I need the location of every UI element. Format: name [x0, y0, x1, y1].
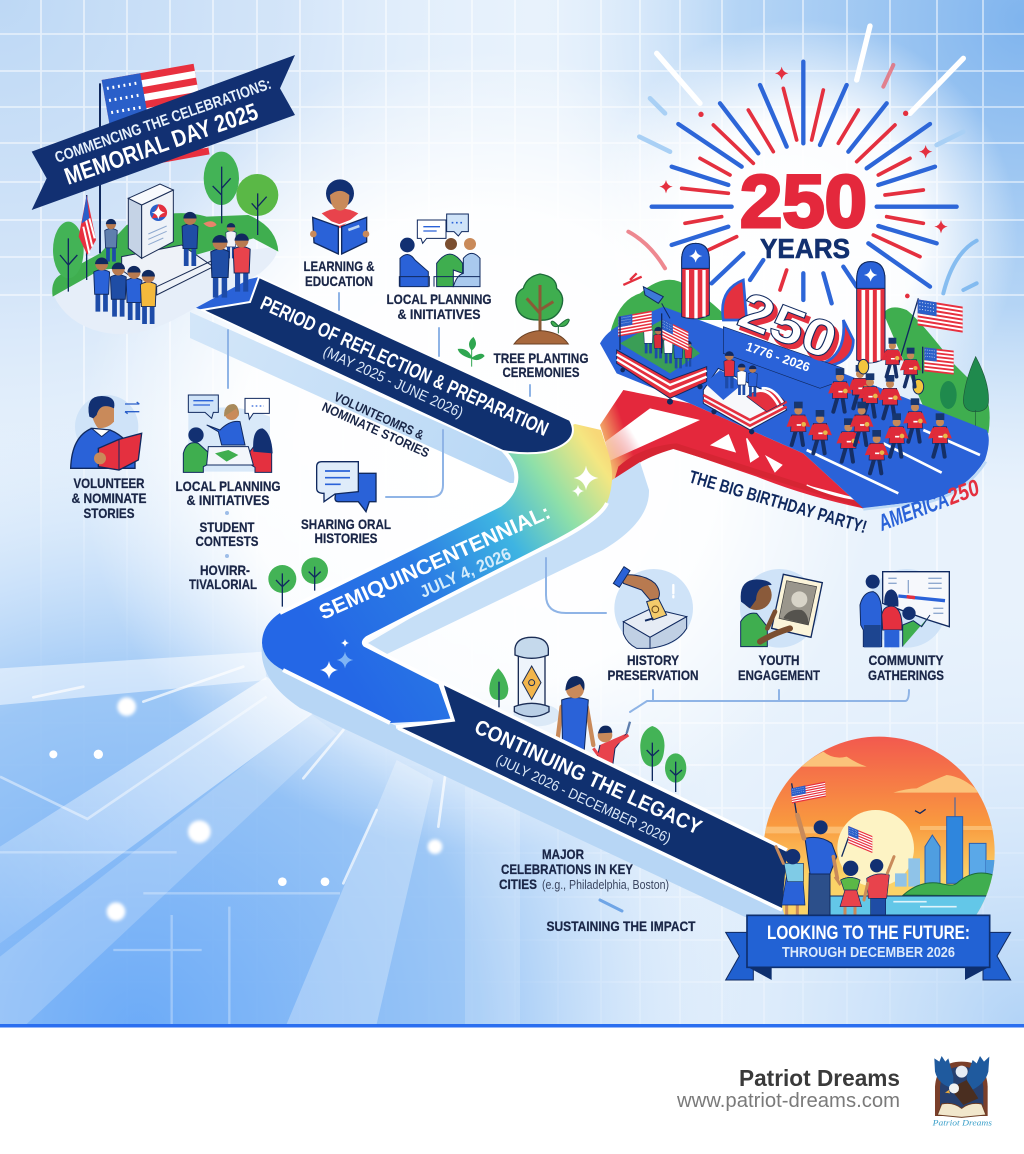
boy [864, 857, 894, 915]
label: local planning left [176, 478, 281, 508]
icons behind the road: mother, child and time capsule [489, 637, 686, 792]
label: major celebrations: MAJOR [542, 846, 584, 862]
label: hovirr-tivalorial [189, 562, 257, 592]
second float [703, 351, 787, 434]
left float [617, 273, 707, 405]
footer website: www.patriot-dreams.com [676, 1090, 900, 1112]
label: America250: AMERICA [874, 486, 952, 536]
label: history preservation: HISTORY [627, 652, 680, 668]
banner arc behind 250 [722, 280, 853, 367]
ribbon text: semiquincentennial: JULY 4, 2026 [417, 544, 514, 602]
banner text: looking to the future [767, 923, 970, 961]
label: learning and education: LEARNING & [304, 258, 374, 274]
icon: small trees left [268, 557, 328, 607]
label: youth engagement: ENGAGEMENT [738, 667, 820, 683]
connector dots [225, 511, 229, 558]
label: community gatherings [868, 652, 944, 683]
marchers flags [884, 298, 963, 387]
label: hovirr-tivalorial: HOVIRR- [200, 562, 250, 578]
people at memorial [94, 212, 250, 324]
icon: small trees [640, 726, 686, 792]
label: major celebrations: (e.g., Philadelphia, Boston) [542, 878, 669, 892]
label: volunteer: VOLUNTEER [74, 475, 144, 491]
label: sustaining the impact: SUSTAINING THE IMPACT [546, 918, 696, 934]
label: the big birthday party: THE BIG BIRTHDAY PARTY! [687, 467, 869, 537]
marching band [789, 359, 949, 473]
label: major celebrations: CELEBRATIONS IN KEY [501, 861, 634, 877]
road: connected timeline ribbon [167, 277, 787, 917]
icon: learning and education [310, 179, 369, 254]
future sunset scene [760, 733, 1000, 919]
father [797, 815, 837, 917]
family looking to future [726, 782, 1011, 980]
label: sharing oral histories: HISTORIES [314, 530, 378, 546]
footer logo: Patriot Dreams [932, 1117, 993, 1127]
footer [0, 1024, 1024, 1154]
banner title text: COMMENCING THE CELEBRATIONS: [53, 76, 274, 167]
label: youth engagement: YOUTH [758, 652, 800, 668]
ribbon text: period of reflection: (MAY 2025 - JUNE 2026) [320, 343, 466, 422]
background light rays [0, 652, 520, 1024]
road sparkles [320, 466, 598, 679]
icon: volunteer reading [71, 395, 142, 470]
250 float sign: 250 [731, 280, 845, 370]
memorial monument [122, 184, 213, 295]
label: volunteer: & NOMINATE [72, 490, 146, 506]
light side strips [190, 312, 785, 917]
banner text: looking to the future: LOOKING TO THE FUTURE: [767, 923, 970, 944]
250 years heading: 250 [740, 160, 867, 243]
label: tree planting: CEREMONIES [502, 364, 580, 380]
middle girl [835, 861, 862, 915]
icon: local planning discussion [399, 214, 480, 287]
raised flag [791, 782, 826, 815]
label: learning and education: EDUCATION [305, 273, 373, 289]
label: volunteer [72, 475, 146, 521]
small flag [79, 195, 96, 280]
label: sharing oral histories: SHARING ORAL [301, 516, 391, 532]
ribbon text: semiquincentennial: SEMIQUINCENTENNIAL: [316, 501, 554, 625]
ribbon text: period of reflection [257, 292, 551, 441]
banner: commencing the celebrations [32, 55, 295, 210]
icon: mother and child [557, 676, 630, 773]
flag on pole [100, 64, 210, 253]
icon: local planning table [183, 395, 273, 472]
label: history preservation: PRESERVATION [608, 667, 698, 683]
label: local planning top: & INITIATIVES [398, 306, 480, 322]
left girl [776, 847, 805, 915]
label: learning and education [304, 258, 374, 289]
left pillar [682, 243, 709, 319]
label: hovirr-tivalorial: TIVALORIAL [189, 576, 257, 592]
label: America250: 250 [943, 474, 983, 510]
banner title text: MEMORIAL DAY 2025 [61, 98, 262, 191]
small flag [842, 826, 872, 857]
top banner and memorial scene [32, 55, 295, 334]
label: major celebrations [499, 846, 669, 892]
icon: time capsule [489, 637, 560, 726]
green hills [52, 213, 278, 297]
banner text: looking to the future: THROUGH DECEMBER 2026 [782, 944, 955, 961]
label: sharing oral histories [301, 516, 391, 546]
icon: history preservation ballot [613, 567, 693, 648]
connector lines [228, 293, 909, 712]
label: student contests [196, 519, 258, 549]
icon: youth engagement portrait [740, 569, 822, 648]
fireworks burst [560, 0, 1024, 480]
label: community gatherings: GATHERINGS [868, 667, 944, 683]
continuing the legacy ribbon [396, 682, 787, 908]
label: tree planting [494, 350, 589, 380]
label: community gatherings: COMMUNITY [868, 652, 944, 668]
icon: sharing oral histories chat [317, 462, 376, 512]
footer logo [932, 1056, 993, 1127]
ribbon caption: volunteers and nominate stories: VOLUNTEOMRS & [332, 389, 426, 443]
label: local planning left: LOCAL PLANNING [176, 478, 281, 494]
period of reflection ribbon [167, 277, 259, 310]
plateau [53, 247, 277, 334]
ribbon text: continuing the legacy: CONTINUING THE LEGACY [471, 716, 705, 839]
250 float sign: 250 [734, 284, 849, 374]
parade platform [600, 243, 990, 509]
1776 2026 block [723, 327, 843, 388]
footer brand name: Patriot Dreams [739, 1065, 900, 1091]
banner: looking to the future [726, 915, 1011, 980]
icon: community gatherings board [860, 569, 949, 648]
label: local planning top [386, 291, 492, 322]
label: student contests: STUDENT [200, 519, 255, 535]
label: local planning left: & INITIATIVES [186, 492, 270, 508]
ribbon text: continuing the legacy: (JULY 2026 - DECEMBER 2026) [493, 752, 673, 847]
label: local planning top: LOCAL PLANNING [386, 291, 492, 307]
label: tree planting: TREE PLANTING [494, 350, 589, 366]
label: volunteer: STORIES [84, 505, 134, 521]
label: history preservation [608, 652, 698, 683]
250 years heading: YEARS [760, 233, 850, 264]
white edges of curve [280, 450, 607, 723]
1776 2026 block: 1776 - 2026 [744, 340, 812, 375]
label: major celebrations: CITIES [499, 876, 537, 892]
semiquincentennial curve [262, 424, 612, 723]
right pillar [857, 262, 885, 363]
label: student contests: CONTESTS [196, 533, 258, 549]
label: youth engagement [738, 652, 820, 683]
ribbon caption: volunteers and nominate stories: NOMINATE STORIES [320, 399, 432, 461]
icon: small arrow dash [600, 900, 622, 911]
icon: tree planting [458, 274, 569, 367]
ribbon text: period of reflection: PERIOD OF REFLECTION & PREPARATION [257, 292, 551, 441]
